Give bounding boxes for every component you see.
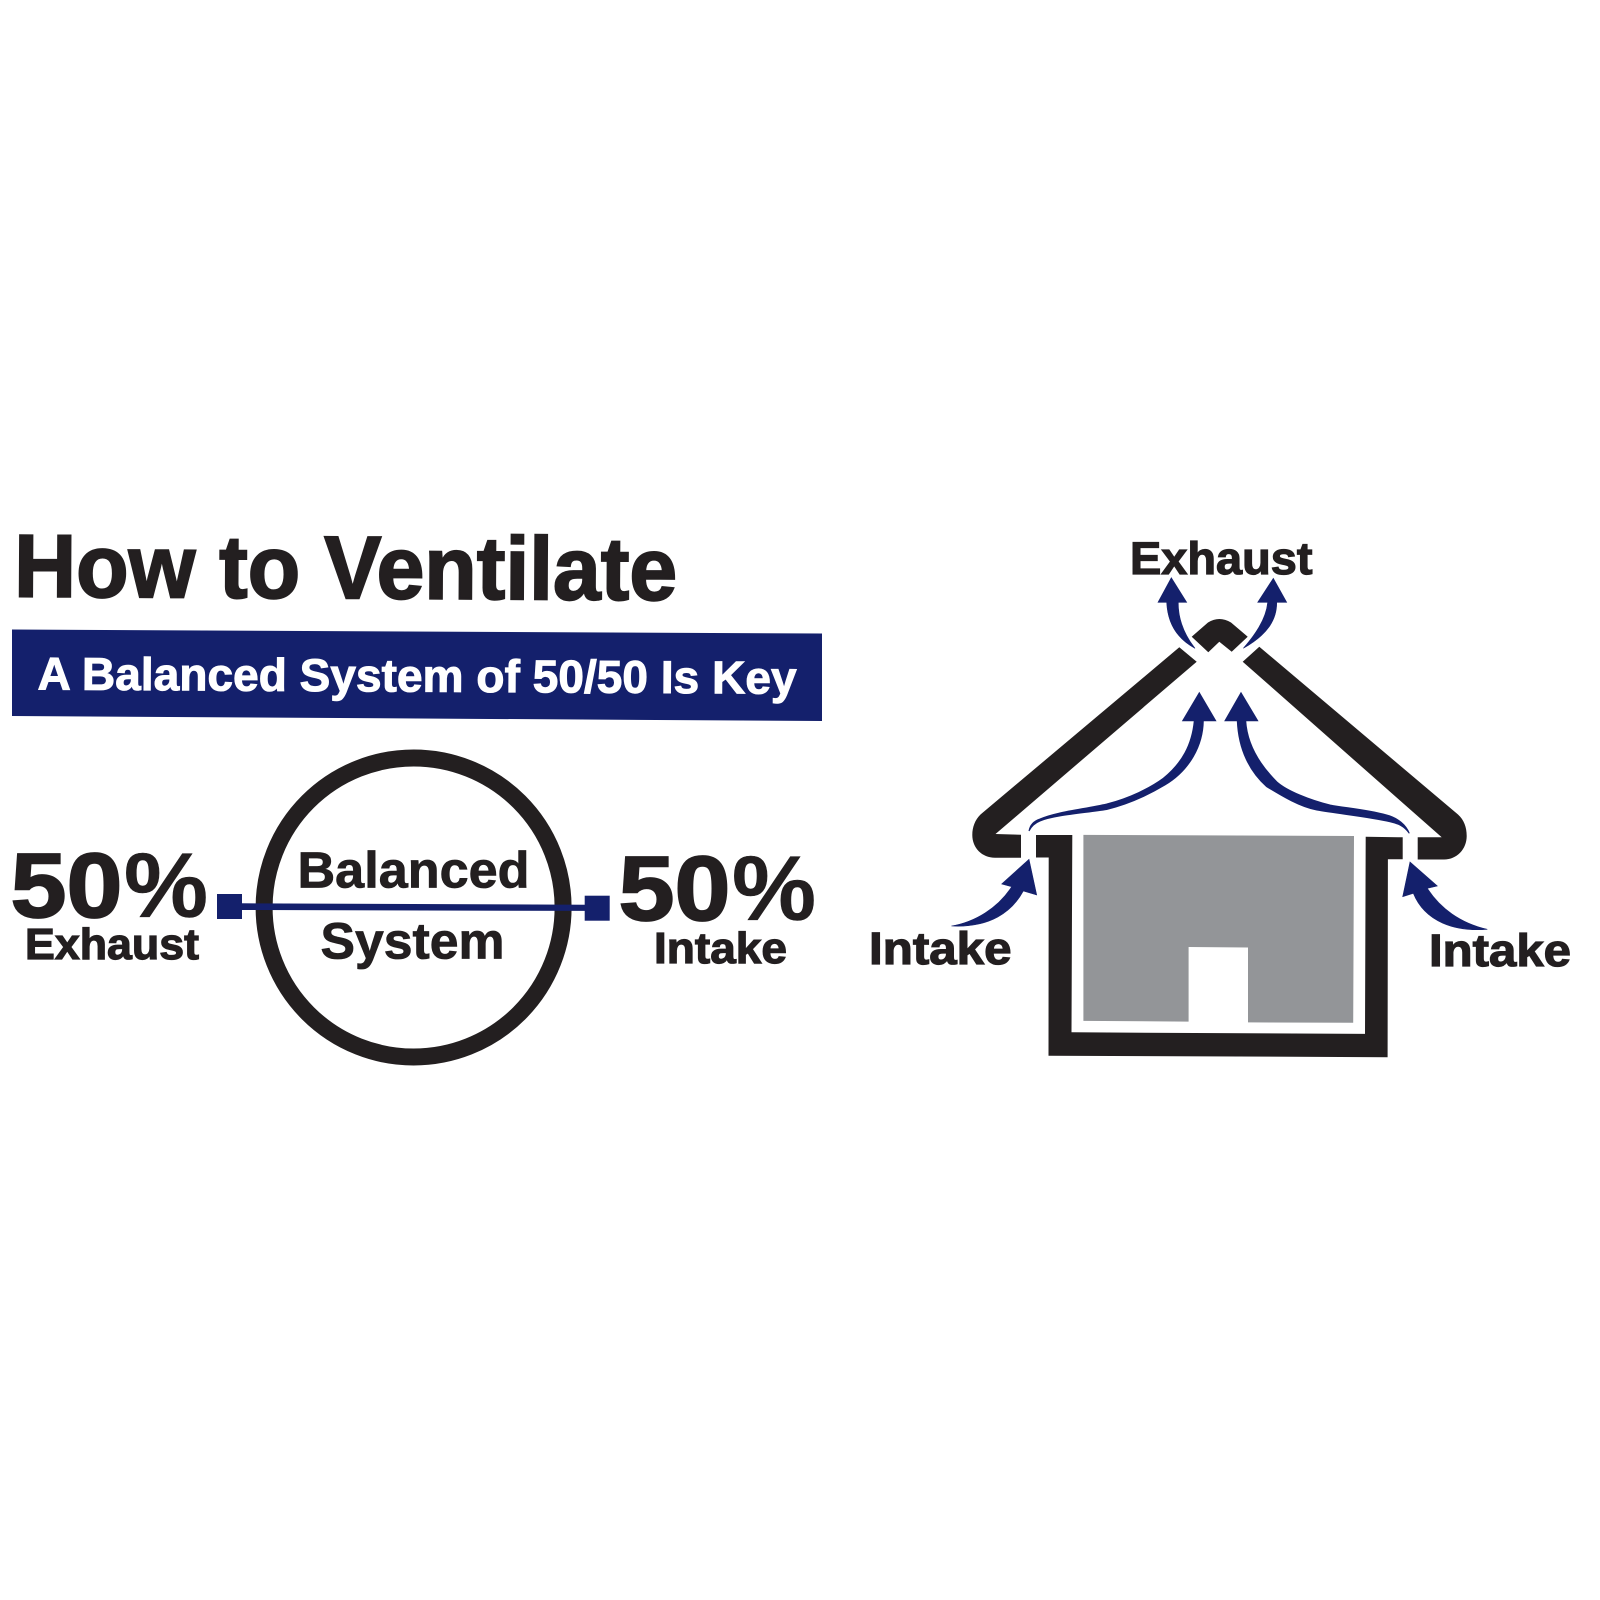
label: Intake right: Intake bbox=[1429, 925, 1571, 976]
ridge vent cap bbox=[1192, 619, 1248, 652]
panel: house ventilation diagram bbox=[869, 533, 1571, 1057]
title: How to Ventilate bbox=[14, 516, 677, 619]
house interior grey block with doorway bbox=[1083, 835, 1354, 1023]
house walls bbox=[1036, 835, 1403, 1057]
arrow: attic airflow left bbox=[1029, 693, 1216, 831]
subtitle banner bbox=[12, 630, 822, 721]
balance diagram: circle with blue beam bbox=[217, 758, 610, 1057]
label: Intake left: Intake bbox=[869, 923, 1012, 974]
circle label: System: System bbox=[320, 912, 504, 970]
right roof slope bbox=[1243, 647, 1467, 860]
arrow: exhaust left bbox=[1158, 578, 1195, 648]
stat: 50% intake bbox=[618, 838, 816, 973]
arrow: attic airflow right bbox=[1225, 693, 1409, 833]
panel: balanced system explainer bbox=[10, 516, 822, 1057]
stat: 50% intake: Intake bbox=[654, 924, 787, 973]
stat: 50% exhaust: % bbox=[124, 835, 208, 937]
left roof slope bbox=[972, 647, 1197, 858]
arrow: exhaust right bbox=[1243, 578, 1287, 648]
stat: 50% exhaust bbox=[10, 835, 208, 969]
arrow: intake right bbox=[1403, 862, 1487, 930]
subtitle banner: A Balanced System of 50/50 Is Key bbox=[37, 648, 797, 704]
stat: 50% intake: 50 bbox=[618, 838, 730, 940]
stat: 50% exhaust: 50 bbox=[10, 835, 122, 937]
arrow: intake left bbox=[951, 859, 1037, 926]
label: Exhaust: Exhaust bbox=[1130, 533, 1313, 584]
stat: 50% intake: % bbox=[732, 838, 816, 940]
stat: 50% exhaust: Exhaust bbox=[25, 920, 199, 969]
circle label: Balanced: Balanced bbox=[298, 842, 530, 899]
